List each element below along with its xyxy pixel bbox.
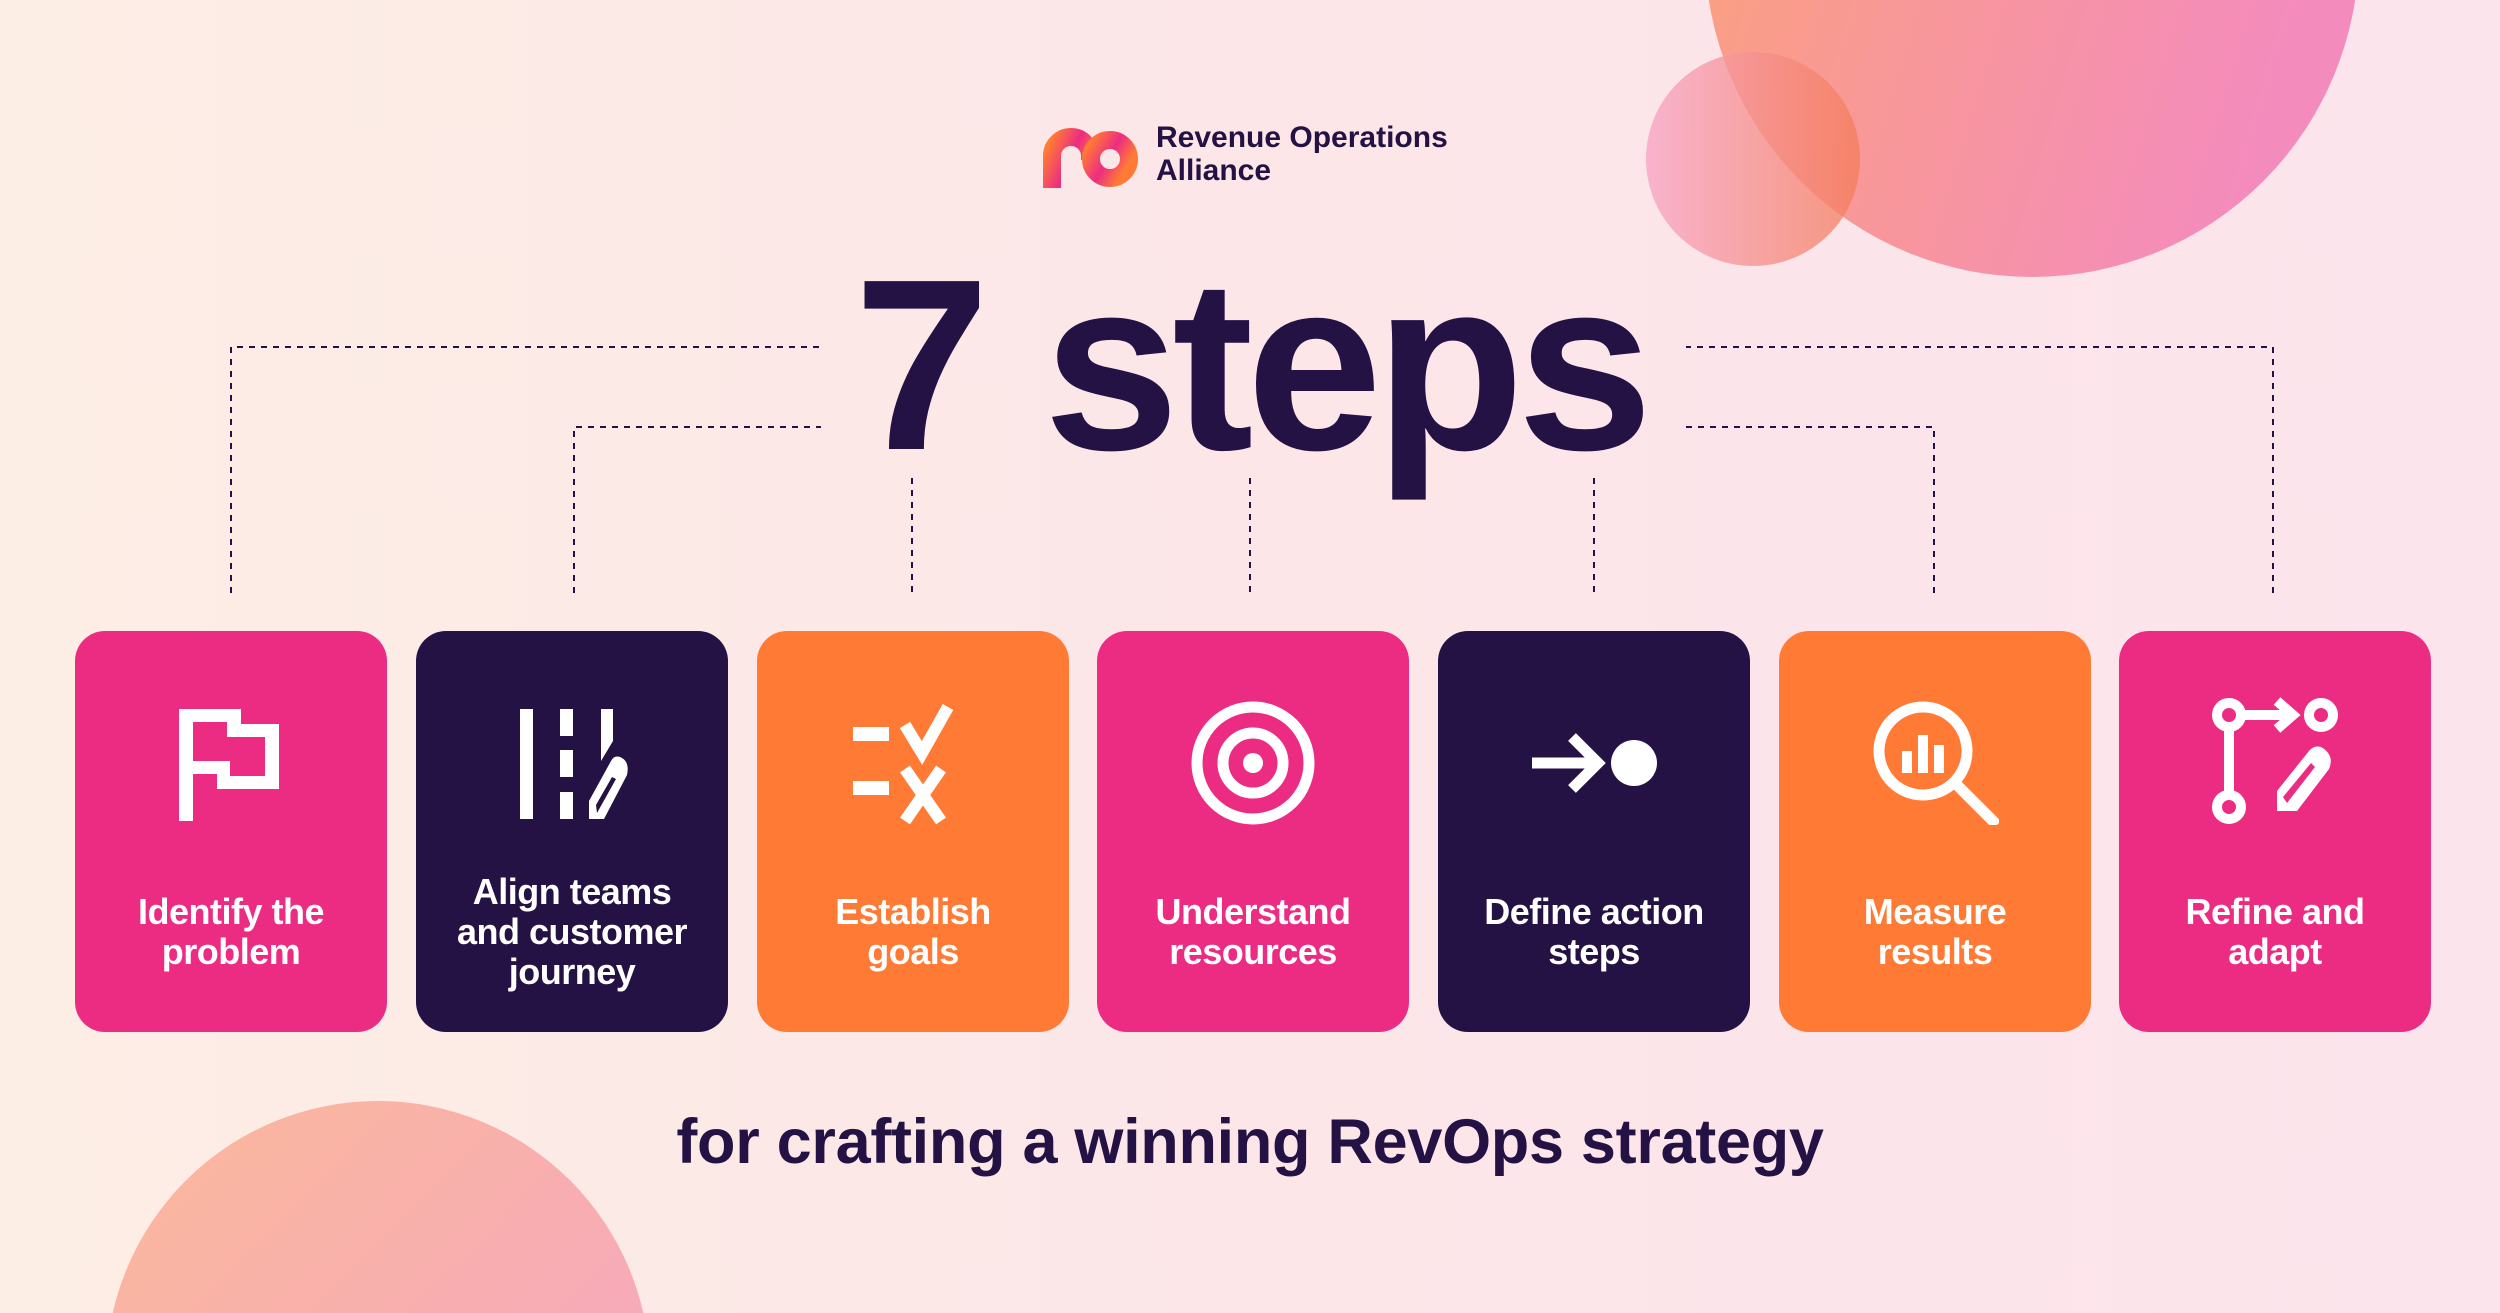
card 7: Refine and adapt: adapt: [2228, 930, 2322, 972]
card 5: Define action steps: steps: [1548, 930, 1640, 972]
card 6: Measure results: results: [1878, 930, 1992, 972]
icon: logo mark: [1043, 128, 1138, 188]
icon: flag: [179, 709, 279, 821]
card 5: Define action steps: [1438, 631, 1750, 1032]
icon: target: [1192, 702, 1314, 824]
icon: git flow with pencil: [2212, 697, 2338, 824]
card 4: Understand resources: Understand: [1155, 890, 1351, 932]
card 2: Align teams: [416, 631, 728, 1032]
card 7: Refine and adapt: [2119, 631, 2431, 1032]
title: 7 steps: [854, 228, 1646, 501]
card 6: Measure results: Measure: [1864, 890, 2006, 932]
subtitle: for crafting a winning RevOps strategy: [676, 1107, 1824, 1177]
card 1: Identify the problem: problem: [162, 930, 300, 972]
card 7: Refine and adapt: Refine and: [2185, 890, 2365, 932]
card 3: Establish goals: [757, 631, 1069, 1032]
logo text: Revenue Operations: [1156, 121, 1448, 154]
logo: [1043, 121, 1448, 188]
logo text: [1156, 121, 1448, 187]
card 3: Establish goals: goals: [867, 930, 959, 972]
card 5: Define action steps: Define action: [1484, 890, 1704, 932]
card 3: Establish goals: Establish: [835, 890, 991, 932]
logo text: Alliance: [1156, 154, 1271, 187]
card 2: Align teams: Align teams: [473, 870, 671, 912]
icon: check and cross: [853, 704, 954, 824]
icon: arrow to dot: [1532, 733, 1657, 793]
card 2: Align teams: and customer: [457, 910, 687, 952]
card 4: Understand resources: [1097, 631, 1409, 1032]
card 4: Understand resources: resources: [1169, 930, 1337, 972]
card 6: Measure results: [1779, 631, 2091, 1032]
card 1: Identify the problem: Identify the: [138, 890, 324, 932]
icon: magnifier with bars: [1874, 702, 1999, 825]
card 1: Identify the problem: [75, 631, 387, 1032]
card 2: Align teams: journey: [509, 950, 635, 992]
icon: columns and pencil: [520, 709, 628, 819]
